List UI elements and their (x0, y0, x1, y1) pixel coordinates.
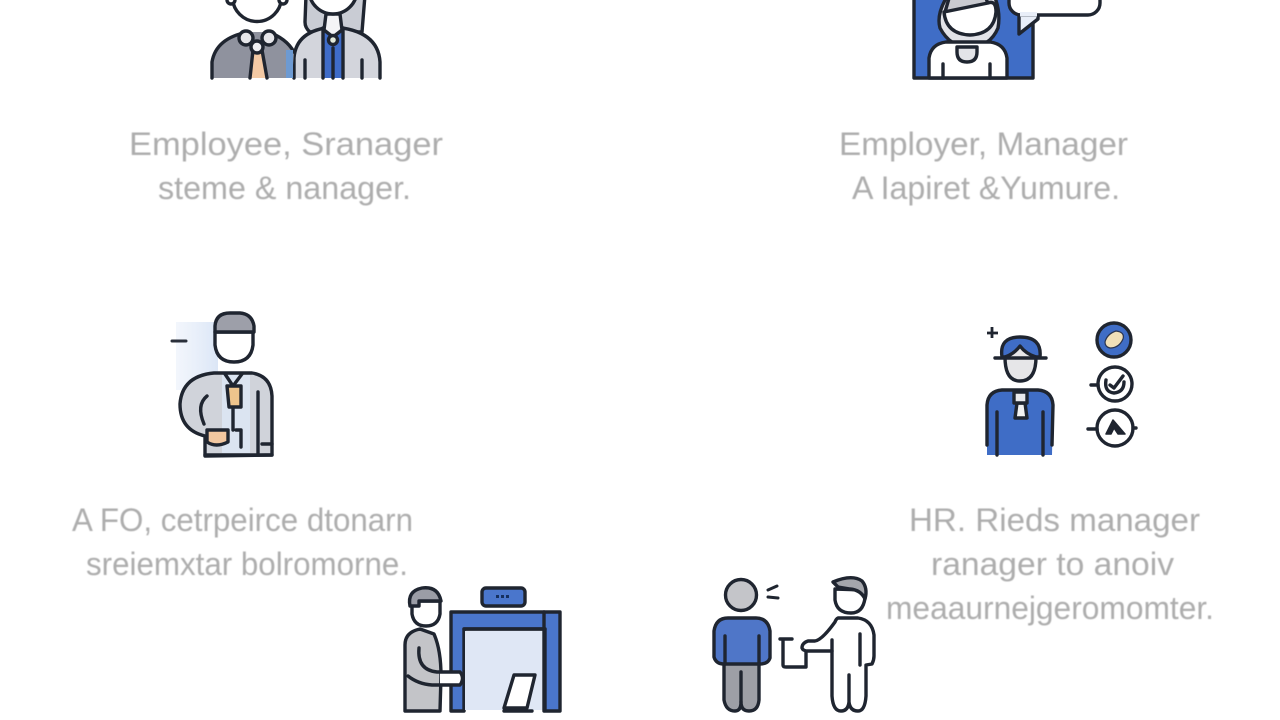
icon: blue badge (1097, 323, 1131, 357)
caption: HR: ranager to anoiv (931, 546, 1174, 582)
panel: consultant (72, 313, 413, 582)
person: blue shirt (714, 580, 778, 711)
icon: HR person with three badges (987, 323, 1136, 455)
caption: consultant: sreiemxtar bolromorne. (86, 546, 408, 582)
item: handed cup (780, 639, 806, 667)
caption: consultant: A FO, cetrpeirce dtonarn (72, 502, 413, 538)
caption: HR (886, 502, 1214, 626)
icon: two people handing over an item (714, 578, 874, 711)
caption: employee and manager: Employee, Sranager (129, 126, 443, 162)
panel: employer and manager (839, 0, 1128, 206)
caption: employer and manager: A Iapiret &Yumure. (852, 170, 1120, 206)
icon: check badge (1091, 367, 1132, 401)
caption: HR: HR. Rieds manager (909, 502, 1200, 538)
caption: consultant (72, 502, 413, 582)
panel: employee and manager (129, 0, 443, 206)
icon: person in blue frame with speech bubble (914, 0, 1100, 78)
icon: triangle badge (1088, 410, 1136, 446)
caption: employer and manager (839, 126, 1128, 206)
icon: person at security gate (405, 588, 560, 711)
caption: employee and manager: steme & nanager. (158, 170, 411, 206)
icon: person in suit holding folder (172, 313, 272, 456)
caption: HR: meaaurnejgeromomter. (886, 590, 1214, 626)
panel: HR (886, 323, 1214, 626)
caption: employee and manager (129, 126, 443, 206)
caption: employer and manager: Employer, Manager (839, 126, 1128, 162)
icon: two business people (212, 0, 380, 78)
person: white outline (802, 578, 874, 711)
